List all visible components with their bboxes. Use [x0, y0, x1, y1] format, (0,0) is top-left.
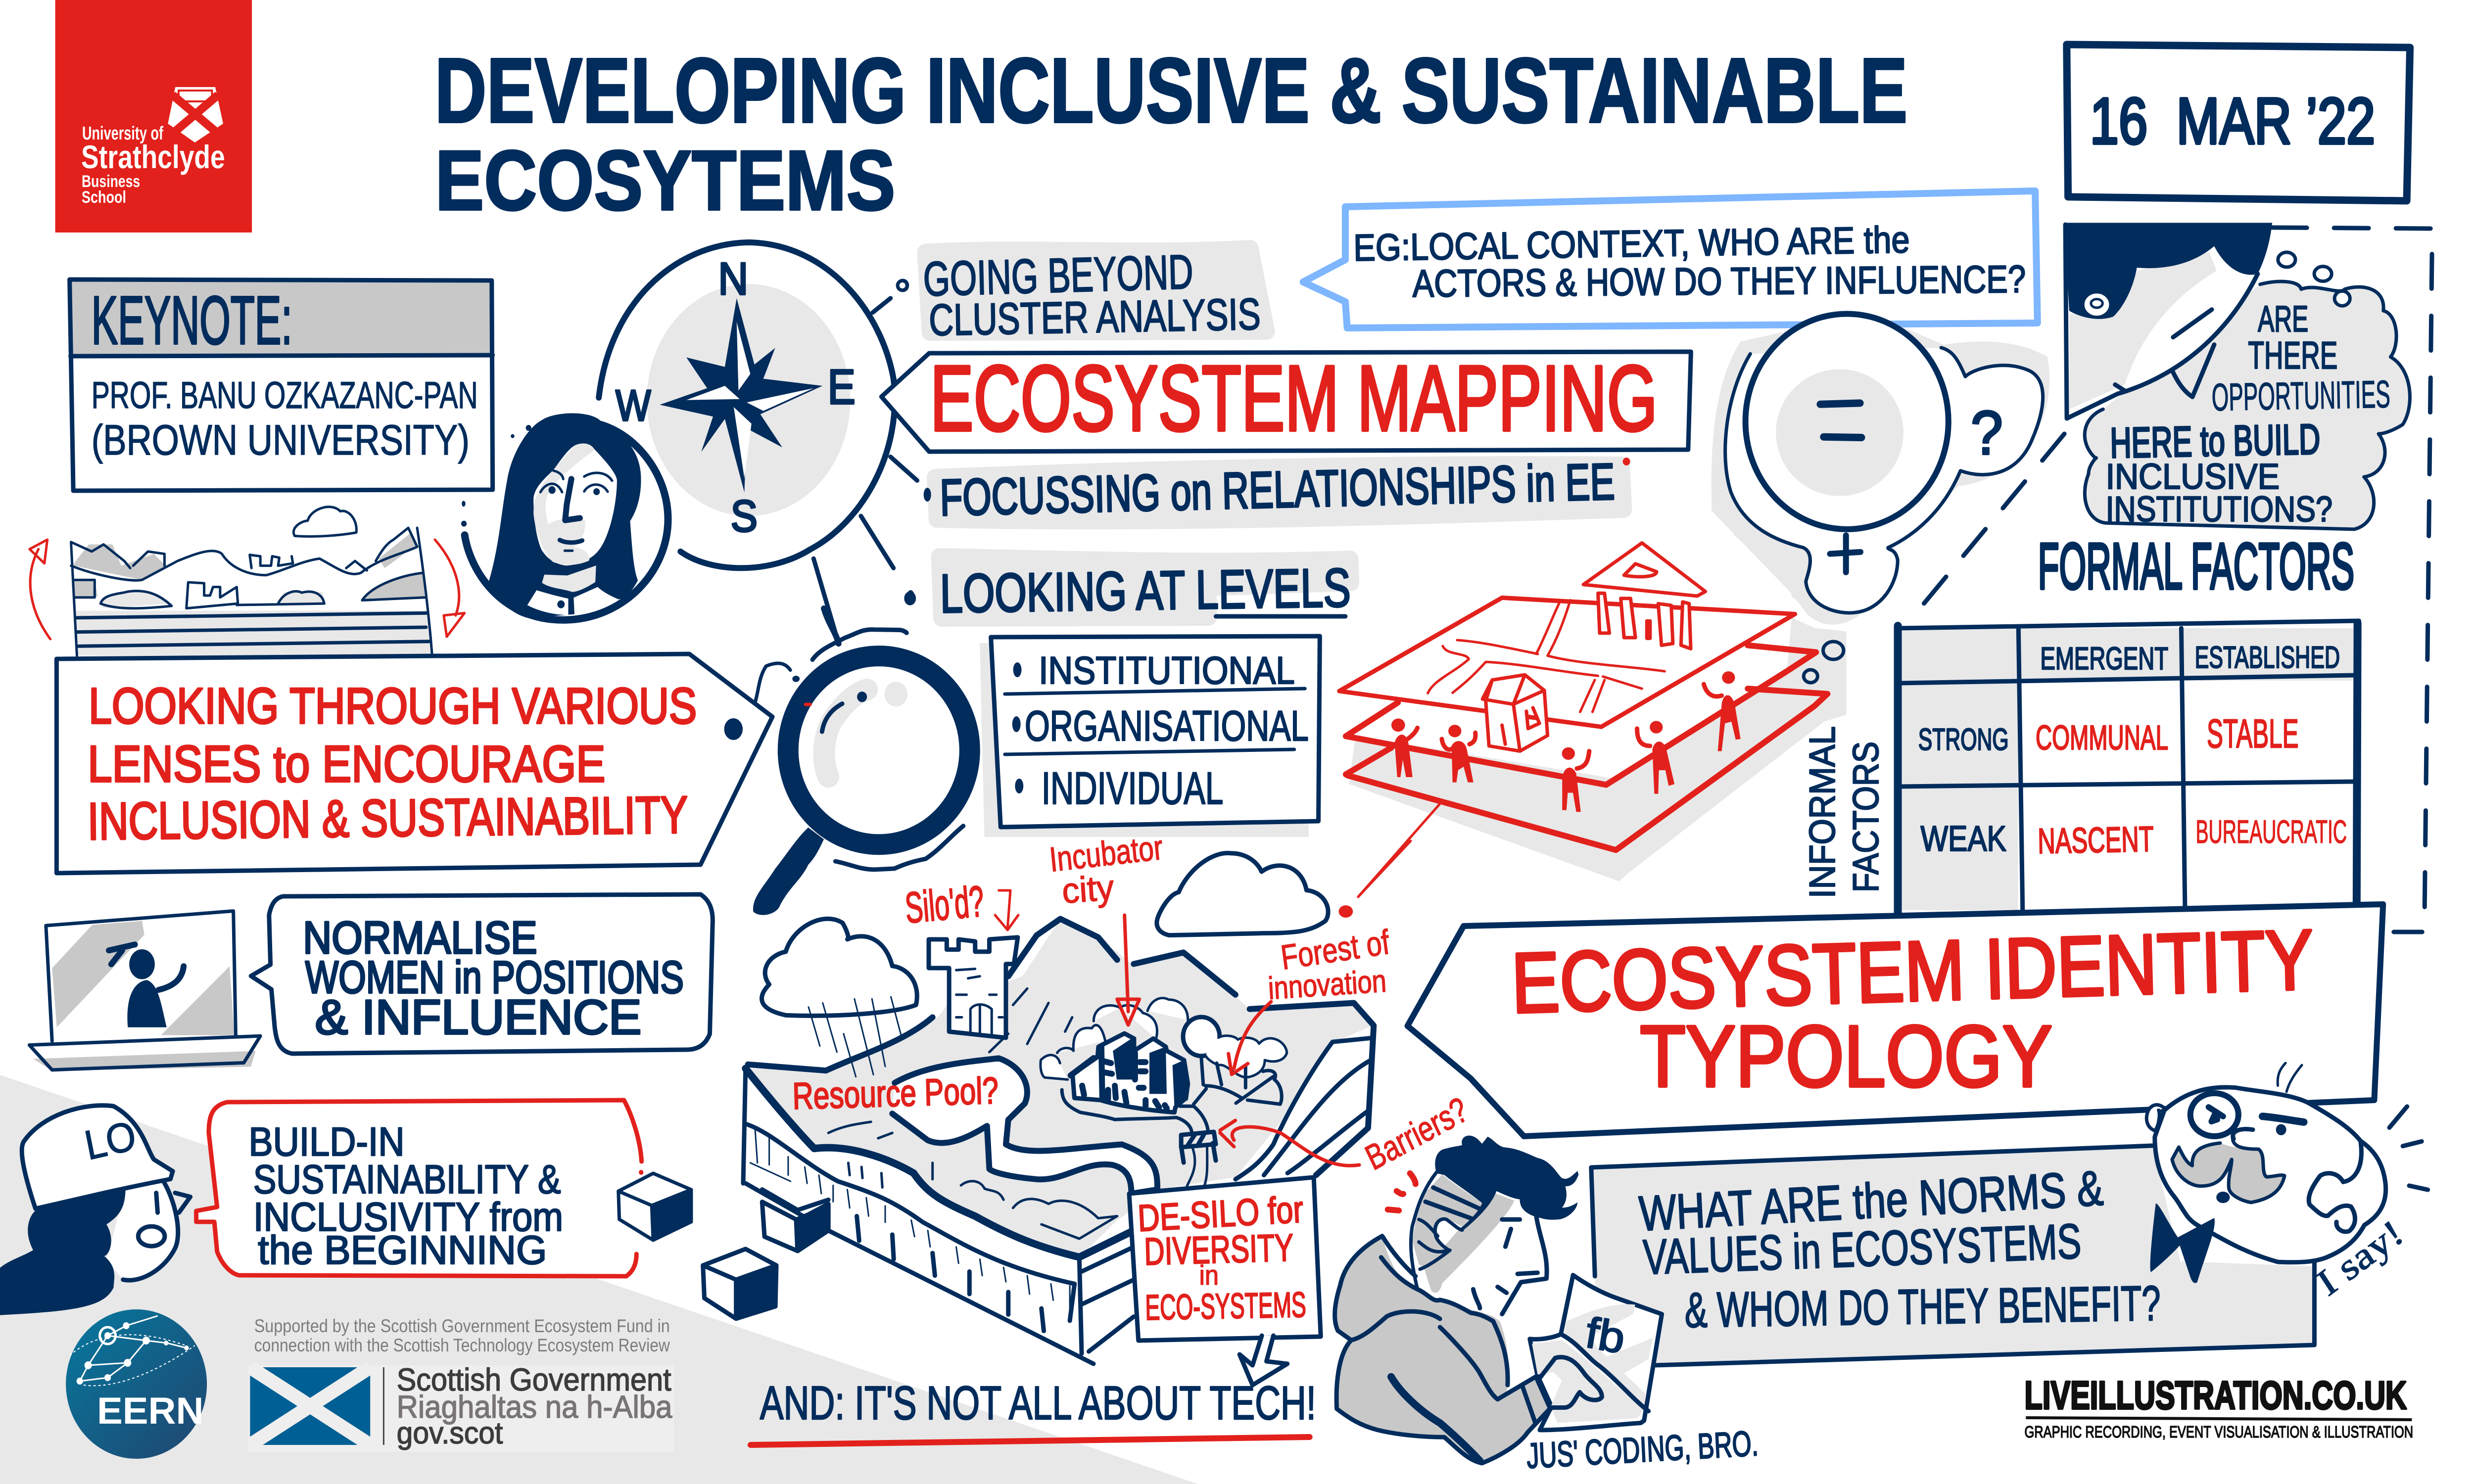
red annotations on landscape: Barriers?	[1360, 1089, 1474, 1178]
panel: build-in sustainability callout: the BEGINNING	[258, 1227, 547, 1273]
title: DEVELOPING INCLUSIVE & SUSTAINABLE	[434, 40, 1907, 142]
panel: levels list: INSTITUTIONAL	[1039, 649, 1295, 693]
panel: going beyond cluster analysis: GOING BEYOND	[923, 245, 1194, 307]
illustration: layered red plates	[1339, 543, 1827, 918]
panel: female symbol and question mark: ?	[1971, 398, 2003, 467]
logo: University of Strathclyde Business School	[55, 0, 252, 232]
red annotations on landscape: Incubator	[1048, 829, 1165, 879]
axis label: informal factors: INFORMAL	[1803, 726, 1843, 898]
arrow: de-silo to tech	[1239, 1336, 1287, 1385]
logo: University of Strathclyde Business School: Strathclyde	[81, 139, 225, 175]
panel: de-silo for diversity box: in	[1199, 1259, 1219, 1291]
panel: example question callout: EG:LOCAL CONTEXT, WHO ARE the	[1353, 218, 1910, 269]
red annotations on landscape: Forest of	[1279, 923, 1392, 977]
table: ecosystem identity typology: WEAK	[1920, 819, 2006, 858]
thought bubble text	[2106, 299, 2390, 529]
icon: city and forest	[1041, 998, 1287, 1186]
logo: University of Strathclyde Business School: University of	[82, 123, 164, 143]
panel: keynote	[70, 279, 493, 491]
red annotations on landscape: city	[1061, 867, 1115, 911]
panel: de-silo for diversity box: ECO-SYSTEMS	[1145, 1285, 1306, 1327]
heading: not all about tech: AND: IT'S NOT ALL ABOUT TECH!	[760, 1376, 1316, 1430]
thought bubble text: ARE	[2258, 299, 2308, 340]
text block: supported by: connection with the Scottish Technology Ecosystem Review	[254, 1335, 670, 1355]
table: ecosystem identity typology: NASCENT	[2038, 819, 2154, 861]
title	[434, 40, 1907, 228]
panel: going beyond cluster analysis	[898, 245, 1267, 345]
table: ecosystem identity typology: EMERGENT	[2040, 641, 2168, 676]
panel: norms and values question: VALUES in ECOSYSTEMS	[1642, 1213, 2082, 1285]
text on coder laptop: fb	[1582, 1308, 1628, 1363]
logo: University of Strathclyde Business School: School	[82, 187, 126, 206]
axis label: informal factors	[1803, 726, 1887, 898]
compass letters: W	[616, 382, 651, 430]
thought bubble text: HERE to BUILD	[2110, 416, 2321, 467]
panel: levels list: ORGANISATIONAL	[1025, 702, 1309, 750]
panel: build-in sustainability callout	[196, 1100, 643, 1276]
axis label: informal factors: FACTORS	[1846, 742, 1887, 892]
red annotations on landscape: Resource Pool?	[792, 1069, 999, 1117]
heading: not all about tech	[751, 1376, 1316, 1445]
title: ECOSYTEMS	[435, 133, 895, 228]
label: I say: I say!	[2310, 1211, 2410, 1304]
thought bubble text: INSTITUTIONS?	[2106, 489, 2332, 529]
credit: live illustration	[2025, 1374, 2413, 1441]
panel: de-silo for diversity box: DIVERSITY	[1143, 1226, 1294, 1274]
table: ecosystem identity typology: BUREAUCRATIC	[2195, 813, 2347, 850]
table: ecosystem identity typology	[1898, 621, 2359, 913]
compass letters	[616, 253, 856, 541]
panel: keynote: PROF. BANU OZKAZANC-PAN	[92, 374, 478, 417]
icon: layered landscape with red arrows	[30, 507, 465, 655]
icon: cubes	[618, 1173, 776, 1319]
panel: keynote: KEYNOTE:	[92, 282, 292, 359]
compass letters: N	[718, 253, 748, 304]
dashed frame line	[1914, 228, 2432, 932]
icon: coder with laptop	[1335, 1136, 1662, 1463]
panel: build-in sustainability callout: SUSTAINABILITY &	[253, 1157, 561, 1202]
panel: ecosystem identity typology banner: TYPOLOGY	[1640, 1008, 2052, 1105]
panel: looking through lenses callout	[56, 654, 772, 873]
panel: normalise women callout: WOMEN in POSITIONS	[305, 951, 684, 1003]
panel: keynote: (BROWN UNIVERSITY)	[92, 417, 470, 464]
panel: ecosystem identity typology banner	[1408, 904, 2383, 1136]
panel: levels list	[980, 636, 1320, 837]
icon: globe with monocle	[2146, 1063, 2428, 1283]
date box: 16 MAR ’22	[2090, 85, 2375, 158]
panel: build-in sustainability callout: INCLUSIVITY from	[253, 1194, 563, 1240]
panel: normalise women callout: NORMALISE	[303, 912, 537, 963]
logo: Scottish Government: Scottish Government	[397, 1362, 671, 1397]
illustration: ecosystem landscape	[703, 841, 1411, 1364]
text block: supported by: Supported by the Scottish Government Ecosystem Fund in	[254, 1316, 670, 1336]
logo: Scottish Government: gov.scot	[397, 1416, 503, 1450]
panel: example question callout: ACTORS & HOW DO THEY INFLUENCE?	[1412, 258, 2026, 306]
logo: EERN	[66, 1309, 207, 1459]
panel: going beyond cluster analysis: CLUSTER ANALYSIS	[929, 289, 1261, 345]
panel: normalise women callout	[251, 894, 713, 1054]
small connector circles	[1804, 642, 1844, 683]
panel: ecosystem mapping banner: ECOSYSTEM MAPPING	[930, 346, 1658, 450]
red annotations on landscape: Silo'd?	[904, 877, 986, 933]
icon: laptop with presenter	[29, 911, 260, 1070]
panel: example question callout	[1303, 191, 2038, 328]
panel: build-in sustainability callout: BUILD-IN	[249, 1119, 405, 1164]
red annotations on landscape	[792, 829, 1474, 1178]
panel: looking through lenses callout: INCLUSION & SUSTAINABILITY	[87, 786, 688, 851]
background: grey bottom-left triangle	[0, 1075, 1198, 1484]
panel: looking through lenses callout: LOOKING THROUGH VARIOUS	[89, 678, 697, 734]
logo: University of Strathclyde Business School: Business	[82, 172, 140, 190]
panel: de-silo for diversity box: DE-SILO for	[1137, 1188, 1304, 1239]
table: ecosystem identity typology: STABLE	[2207, 711, 2299, 756]
logo: EERN: EERN	[97, 1390, 204, 1432]
hard hat logo letters: LO	[81, 1112, 140, 1169]
table: ecosystem identity typology: ESTABLISHED	[2195, 640, 2340, 674]
panel: focussing on relationships: FOCUSSING on RELATIONSHIPS in EE	[939, 453, 1616, 527]
icon: compass	[599, 242, 917, 639]
panel: peeking person with thought bubble	[2064, 223, 2410, 529]
icon: magnifying glass	[753, 608, 970, 915]
logo: Scottish Government	[248, 1362, 674, 1452]
red annotations on landscape: innovation	[1267, 964, 1387, 1006]
text block: supported by	[254, 1316, 670, 1355]
logo: Scottish Government: Riaghaltas na h-Alba	[397, 1390, 672, 1425]
caption: jus coding: JUS' CODING, BRO.	[1525, 1423, 1759, 1476]
table: ecosystem identity typology: COMMUNAL	[2036, 719, 2168, 757]
icon: woman portrait	[461, 413, 668, 620]
icon: woman with hard hat	[0, 1106, 190, 1315]
date box	[2067, 45, 2410, 201]
thought bubble text: THERE	[2248, 334, 2337, 377]
thought bubble text: INCLUSIVE	[2106, 457, 2280, 496]
panel: norms and values question	[1591, 1145, 2314, 1365]
panel: de-silo for diversity box	[1129, 1177, 1321, 1341]
panel: norms and values question: & WHOM DO THEY BENEFIT?	[1684, 1275, 2161, 1338]
panel: levels list: INDIVIDUAL	[1042, 762, 1223, 814]
panel: ecosystem identity typology banner: ECOSYSTEM IDENTITY	[1510, 912, 2315, 1031]
panel: normalise women callout: & INFLUENCE	[315, 990, 642, 1045]
panel: norms and values question: WHAT ARE the NORMS &	[1638, 1160, 2104, 1242]
compass letters: E	[828, 360, 856, 415]
panel: looking through lenses callout: LENSES to ENCOURAGE	[88, 736, 606, 793]
icon: tail dot on arrow box	[724, 718, 743, 740]
compass letters: S	[731, 492, 758, 541]
table: ecosystem identity typology: STRONG	[1918, 722, 2009, 756]
panel: looking at levels: LOOKING AT LEVELS	[940, 557, 1351, 624]
icon: grey shadow behind layered plates	[1349, 534, 1846, 881]
panel: female symbol and question mark	[1712, 314, 2049, 625]
